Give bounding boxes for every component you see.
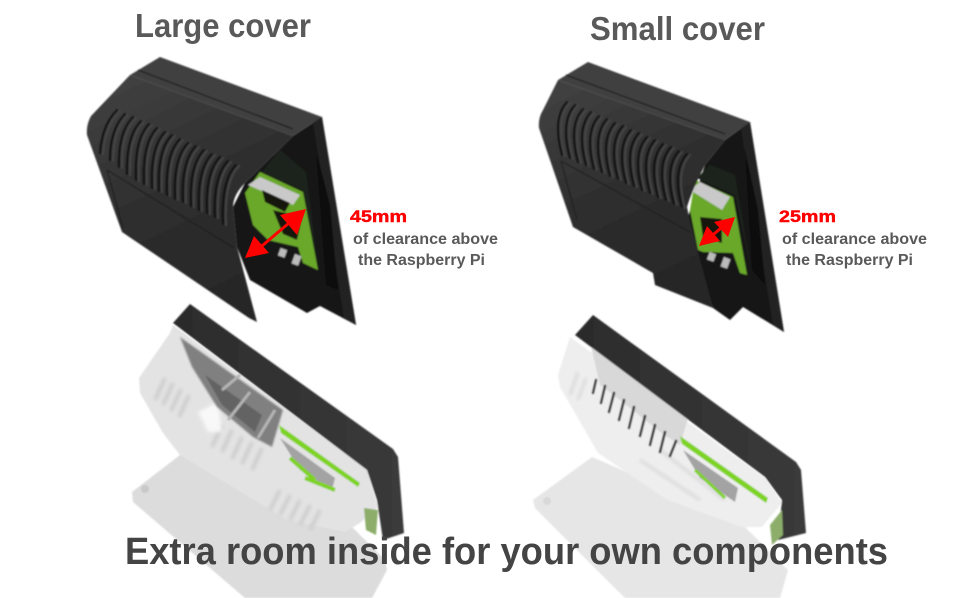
large cover assembled, transparent view (132, 304, 404, 598)
large cover enclosure, exploded view (87, 57, 356, 325)
large cover clearance arrow (245, 209, 306, 258)
vent slots seen through cover (593, 380, 676, 456)
title: large cover: Large cover (135, 7, 311, 44)
front face (539, 80, 725, 308)
title: small cover: Small cover (590, 10, 765, 47)
top face (130, 57, 322, 136)
green circuit board (245, 172, 318, 270)
large cover callout (350, 208, 498, 269)
ghost vent ribs (155, 378, 320, 530)
translucent body (558, 337, 782, 527)
vent slots (100, 110, 239, 225)
top face (558, 62, 750, 140)
translucent body (139, 325, 378, 532)
translucent stand (132, 455, 387, 598)
interior and back panel (687, 122, 784, 332)
dark interior area seen through cover (590, 342, 690, 445)
translucent stand (533, 457, 788, 598)
green circuit board (690, 180, 747, 275)
small cover callout: of clearance above (782, 231, 927, 248)
header pins (248, 177, 300, 205)
green circuit board (680, 436, 768, 503)
large cover callout: the Raspberry Pi (358, 252, 485, 269)
vent slots (558, 102, 690, 208)
dark display band (173, 304, 404, 540)
caption: Extra room inside for your own components (125, 531, 888, 573)
ghost vent and ledge shading (570, 372, 725, 500)
front face (87, 75, 293, 322)
header pins (690, 182, 730, 210)
small cover assembled, transparent view (533, 315, 806, 598)
chips (273, 210, 302, 240)
white highlights (198, 402, 222, 432)
small cover callout (779, 208, 927, 269)
dark display band (575, 315, 806, 540)
small cover callout: 25mm (779, 208, 836, 226)
green circuit board (279, 425, 360, 487)
small cover callout: the Raspberry Pi (786, 252, 913, 269)
interior and back panel (233, 117, 356, 325)
small cover clearance arrow (699, 217, 735, 246)
small cover enclosure, exploded view (539, 62, 784, 332)
dark interior seen through cover (180, 337, 283, 447)
chips (700, 217, 722, 243)
large cover callout: of clearance above (353, 231, 498, 248)
large cover callout: 45mm (350, 208, 407, 226)
